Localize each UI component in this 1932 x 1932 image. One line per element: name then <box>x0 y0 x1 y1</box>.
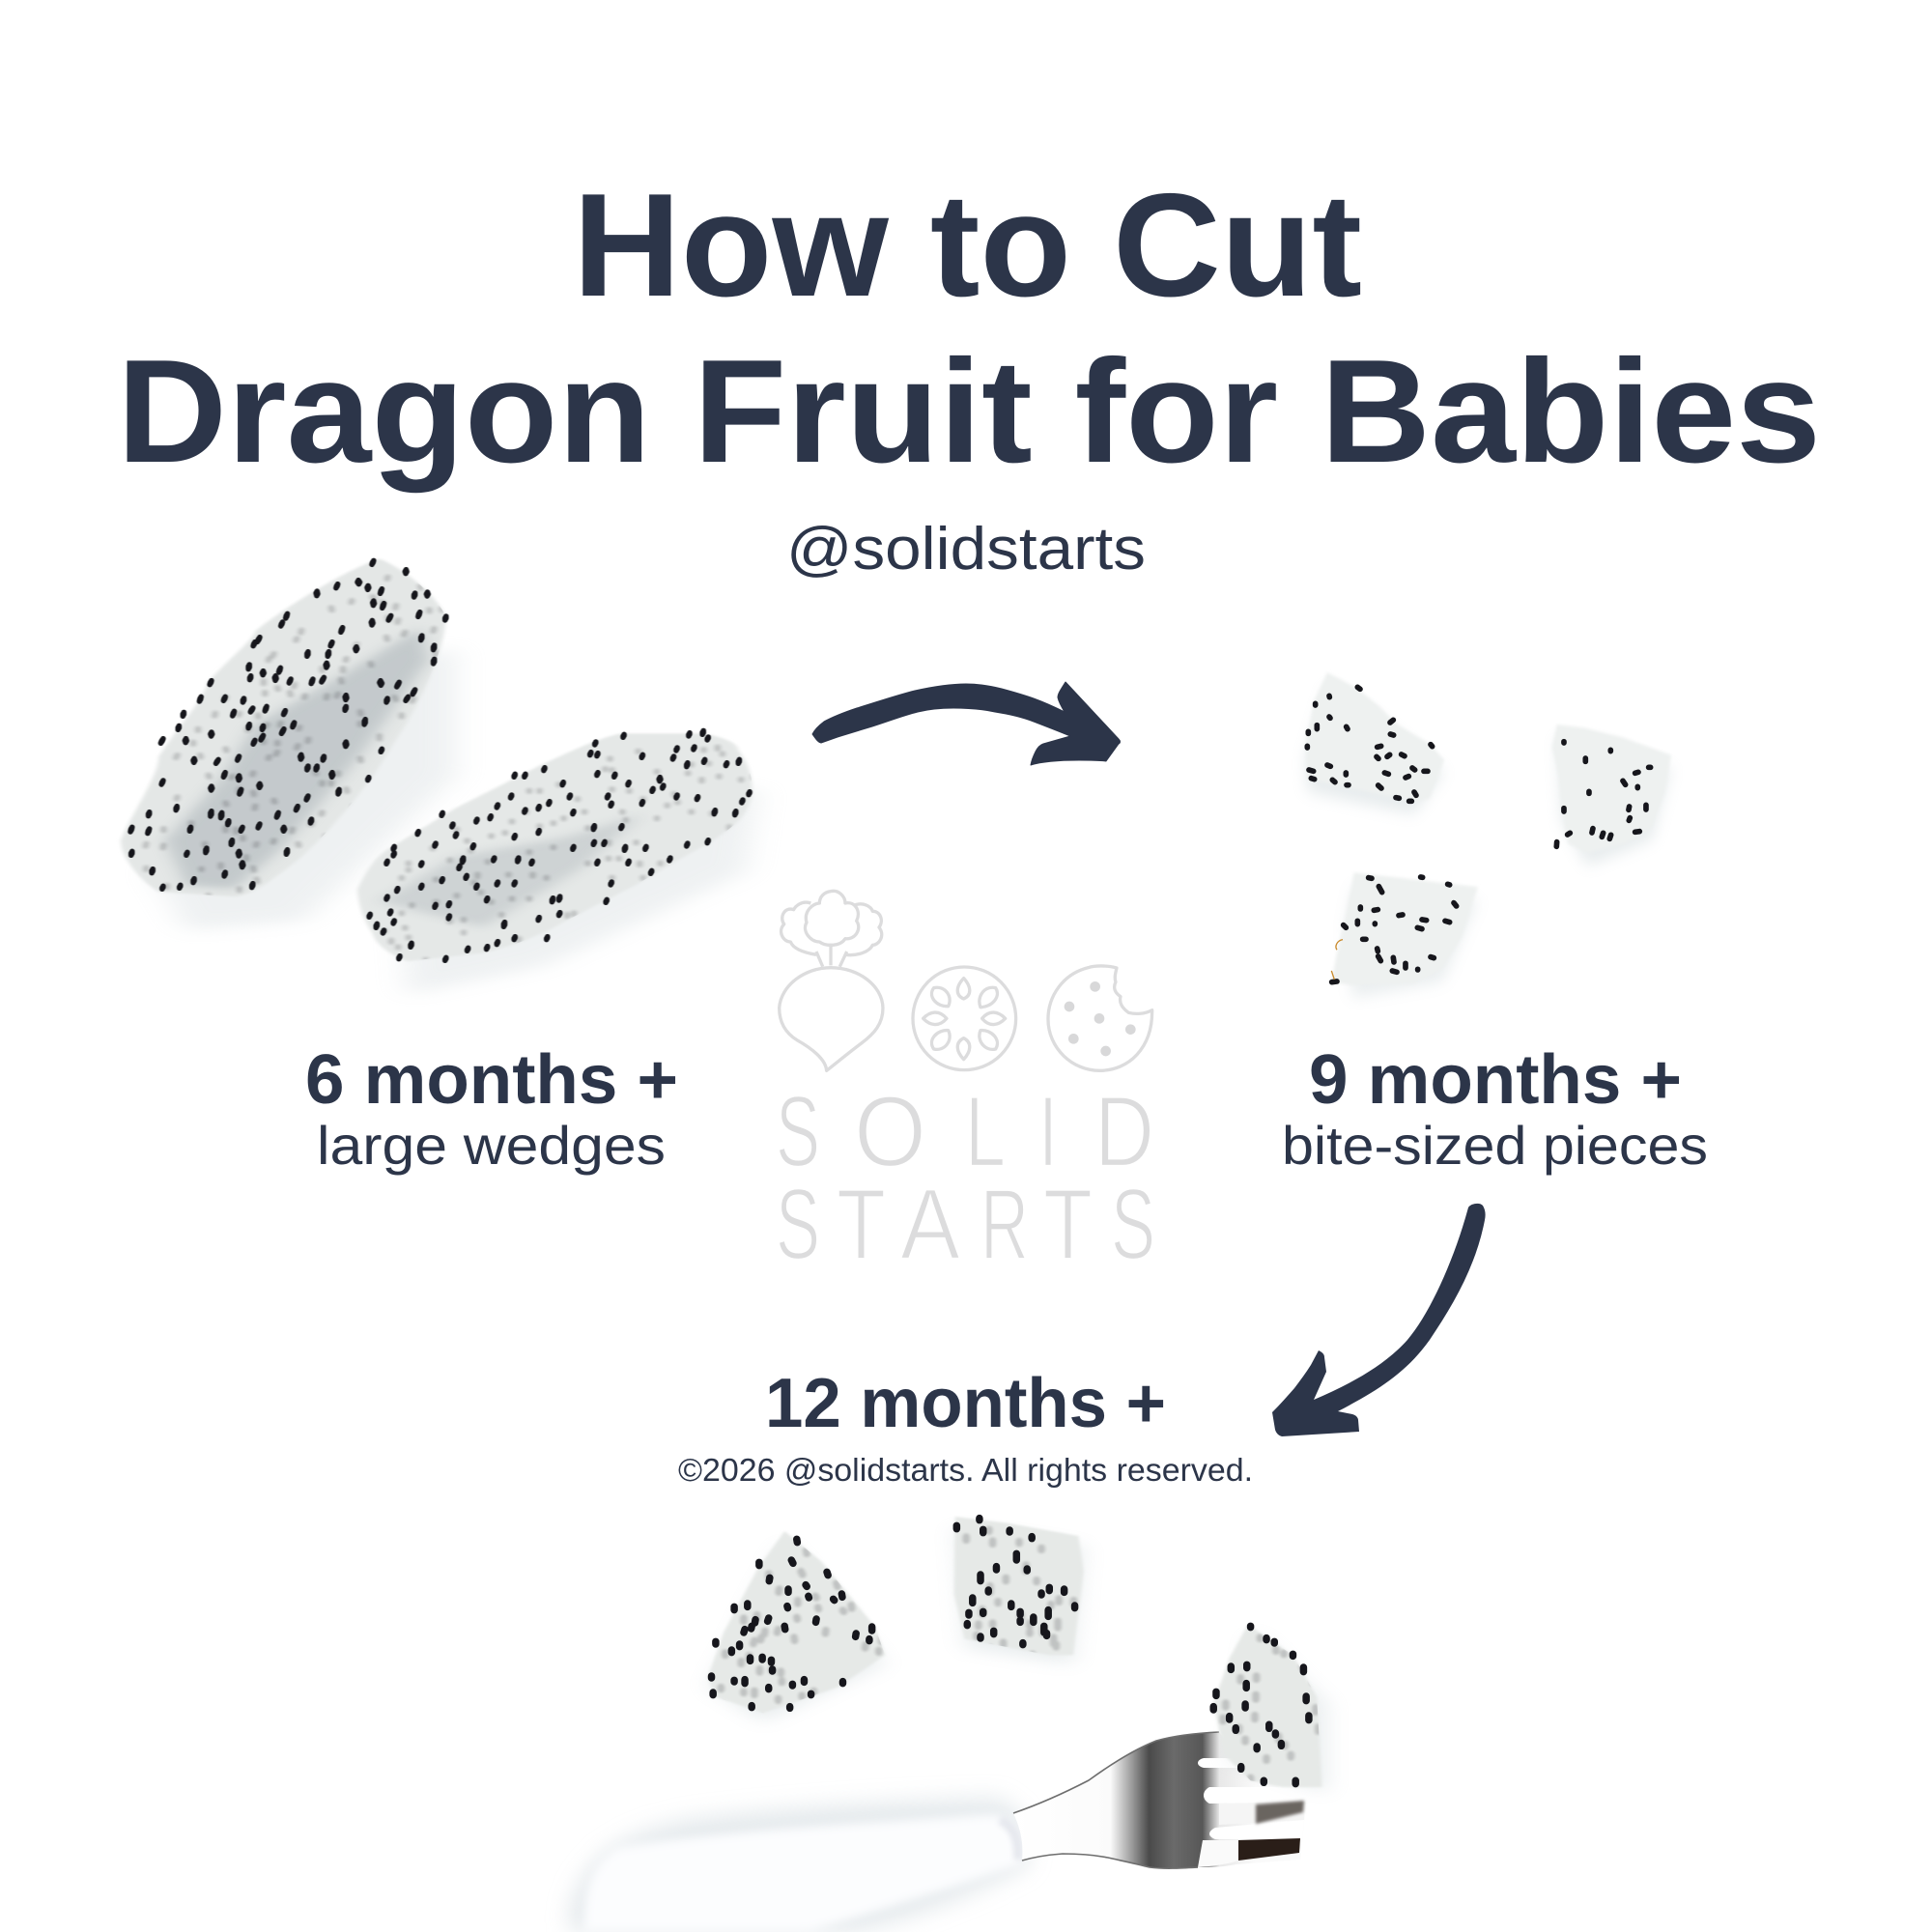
label: 9 months: 9 months + <box>1309 1041 1682 1119</box>
title: How to Cut <box>573 163 1362 327</box>
logo wordmark: S <box>776 1169 820 1281</box>
label: 12 months: 12 months + <box>765 1365 1166 1442</box>
image: three bite-sized pieces <box>1306 672 1671 998</box>
logo wordmark: S <box>776 1076 820 1188</box>
logo wordmark: T <box>837 1169 886 1281</box>
copyright: ©2026 @solidstarts. All rights reserved. <box>678 1452 1253 1488</box>
logo wordmark: D <box>1094 1076 1154 1188</box>
fruit pieces <box>708 1517 1327 1795</box>
fork handle <box>570 1799 1029 1932</box>
logo wordmark: S <box>1111 1169 1155 1281</box>
fork head <box>1013 1732 1306 1868</box>
logo wordmark: A <box>900 1169 961 1281</box>
image: two large dragon fruit wedges <box>121 558 764 995</box>
logo wordmark: I <box>1038 1076 1058 1188</box>
label: 6 months: large wedges <box>317 1115 666 1176</box>
label: 6 months <box>305 1041 678 1176</box>
logo wordmark: L <box>965 1076 1006 1188</box>
logo wordmark: R <box>980 1169 1029 1281</box>
label: 9 months: bite-sized pieces <box>1282 1115 1708 1176</box>
logo wordmark: O <box>854 1076 926 1188</box>
arrow: wedges to pieces <box>812 682 1121 765</box>
logo wordmark <box>776 1076 1155 1281</box>
logo icons: beet, cucumber slice, cookie <box>780 891 1152 1070</box>
image: three pieces with baby fork <box>570 1517 1327 1932</box>
label: 6 months: 6 months + <box>305 1041 678 1119</box>
label: 9 months <box>1282 1041 1708 1176</box>
title <box>117 163 1821 494</box>
handle @solidstarts: @solidstarts <box>786 516 1146 582</box>
watermark logo: Solid Starts <box>776 891 1155 1281</box>
title: Dragon Fruit for Babies <box>117 329 1821 494</box>
arrow: pieces to 12 months <box>1272 1204 1486 1436</box>
logo wordmark: T <box>1043 1169 1093 1281</box>
